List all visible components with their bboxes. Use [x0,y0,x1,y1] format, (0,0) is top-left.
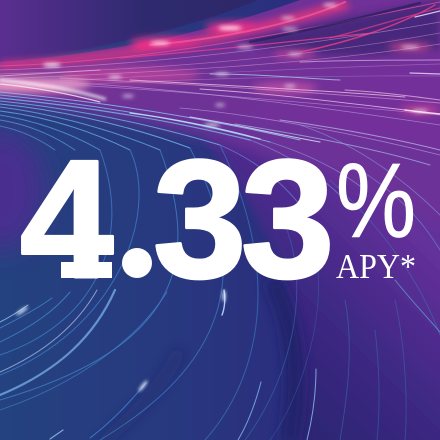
streak lines: spiral curves [0,125,440,440]
decimal point [122,248,152,278]
background: dark sky wedge at top [0,0,258,62]
digit 3 second: 3 [241,125,334,313]
big rate figure: 4.33 [20,125,334,313]
background: lower right purple sweep [200,130,440,440]
background: purple fade into blue [0,60,440,235]
background: purple glow at left edge [0,130,45,250]
percent sign: % [336,142,416,260]
background: dark curved bands [100,280,295,440]
streak lines: curve highlights [15,290,225,392]
background: dark streak zone top right [240,0,440,56]
streak lines: white hot spots [43,4,428,126]
background: purple middle band [0,0,440,150]
APY label: APY* [336,247,416,286]
glow: pink ribbon along horizon [0,0,440,114]
digit 4 slab foot [61,262,112,278]
digit 3 first: 3 [153,125,246,313]
streak lines: top fan [0,2,440,125]
digit 4: 4 [20,125,113,313]
streak lines: bright white-blue band at left [0,80,440,205]
